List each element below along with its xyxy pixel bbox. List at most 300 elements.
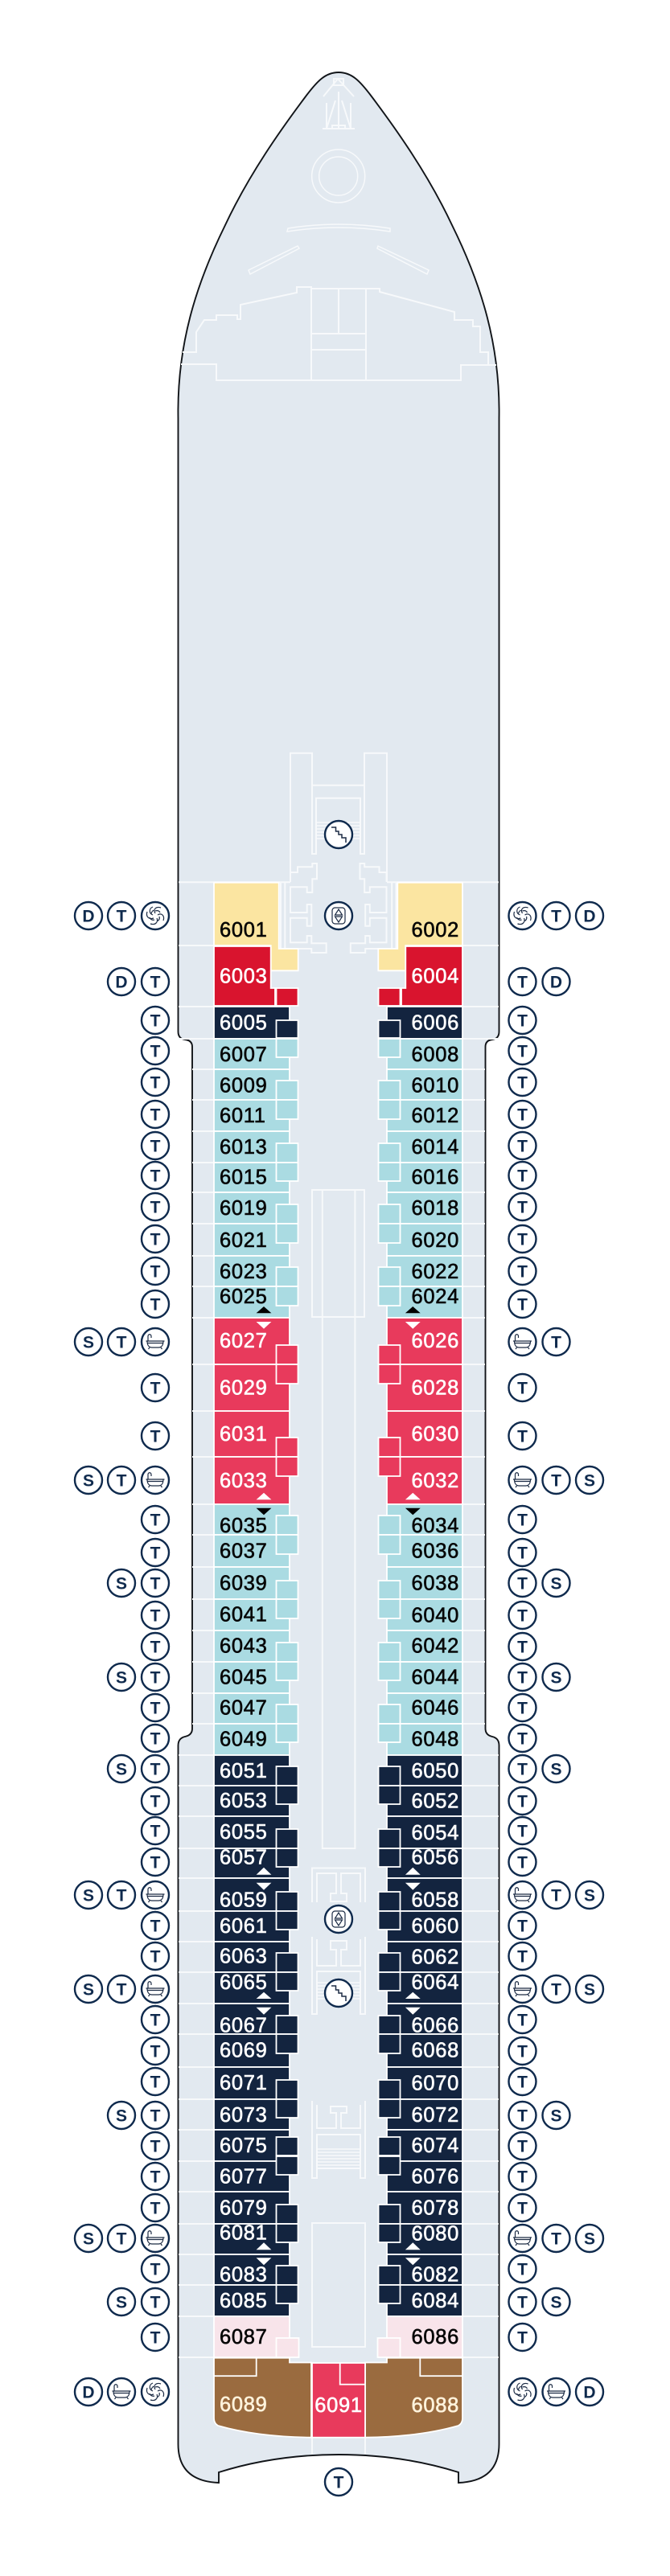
anchor winch [323,79,355,129]
cabin 6039: 6039 [220,1573,268,1595]
icons row 6065 [75,1975,169,2003]
icon 6031: T [150,1428,161,1446]
icon 6071: T [150,2073,161,2092]
icon 6011: T [150,1106,161,1124]
cabin 6074: 6074 [411,2135,459,2157]
cabin 6005 [214,1007,298,1039]
cabin 6040: 6040 [411,1605,459,1627]
cabin 6035 [214,1504,298,1537]
cabin 6011 [214,1100,298,1131]
cabin 6025: 6025 [220,1286,268,1308]
icon: aft twin bed: T [334,2473,344,2492]
cabin 6061 [214,1911,298,1942]
icons row 6080 [508,2225,603,2252]
icons row 6064: T [551,1981,561,1999]
icons row 6033 [75,1466,169,1494]
icon 6061 [142,1912,169,1939]
icon 6075: T [150,2137,161,2156]
cabin 6065: 6065 [220,1971,268,1994]
icon 6029 [142,1374,169,1401]
icon 6036: T [517,1544,528,1563]
icon 6061: T [150,1917,161,1936]
icons row 6038: S [550,1574,562,1594]
icon 6006: T [517,1011,528,1031]
cabin 6012: 6012 [411,1105,459,1127]
cabin 6021 [214,1224,298,1256]
icons row 6051 [108,1755,169,1782]
icon 6005: T [150,1011,161,1031]
icons row 6073 [108,2102,169,2129]
icon: aft twin bed [325,2468,352,2496]
cabin 6028 [378,1364,462,1411]
cabin 6089: 6089 [220,2393,268,2416]
icon 6067 [142,2006,169,2033]
icons row 6027 [75,1328,169,1356]
cabin 6069 [214,2034,298,2067]
cabin 6051 [214,1755,298,1786]
icon 6049 [142,1725,169,1752]
cabin 6018 [378,1192,462,1224]
aft stair lines [312,2101,365,2178]
icon 6049: T [150,1730,161,1748]
icons row 6026: T [551,1333,561,1352]
icon 6052: T [517,1793,528,1811]
icon 6015: T [150,1167,161,1185]
icon 6083 [142,2255,169,2283]
icons row 6026 [508,1328,569,1356]
icons row 6032 [508,1466,603,1494]
icon 6042 [508,1633,536,1660]
icon 6070: T [517,2073,528,2092]
cabin 6071 [214,2067,298,2099]
icon 6022: T [517,1262,528,1282]
cabin 6024 [378,1286,462,1318]
icon 6078 [508,2194,536,2221]
cabin 6045: 6045 [220,1666,268,1688]
icons row 6088: D [583,2383,596,2402]
icon 6014: T [517,1137,528,1156]
cabin 6073: 6073 [220,2104,268,2127]
cabin 6067 [214,2004,298,2037]
icon 6082 [508,2255,536,2283]
icons row 6084 [508,2288,569,2316]
icon 6048 [508,1725,536,1752]
icons row 6044: S [550,1669,562,1687]
cabin 6065 [214,1971,298,2004]
icon 6037: T [150,1544,161,1563]
cabin 6008 [378,1039,462,1069]
icon 6030: T [517,1428,528,1446]
icon 6012 [508,1101,536,1128]
icons row 6002 [508,902,603,929]
icons row 6064 [508,1975,603,2003]
icon 6077: T [150,2168,161,2187]
icon 6007: T [150,1042,161,1061]
cabin 6032 [378,1457,462,1504]
icon 6053: T [150,1793,161,1811]
icon 6037 [142,1539,169,1566]
cabin 6025 [214,1286,298,1318]
cabin 6057: 6057 [220,1847,268,1869]
icon 6057 [142,1848,169,1876]
cabin 6001 [214,883,298,970]
curved bench [287,224,390,232]
cabin 6010 [378,1069,462,1100]
icon 6063: T [150,1947,161,1967]
cabin 6042: 6042 [411,1635,459,1658]
icons row 6032: S [584,1471,595,1491]
icons row 6004: D [550,973,562,992]
cabin 6016 [378,1163,462,1192]
cabin 6078: 6078 [411,2197,459,2220]
icon 6035: T [150,1512,161,1529]
icon 6060: T [517,1917,528,1936]
cabin 6086: 6086 [411,2326,459,2348]
cabin 6014 [378,1131,462,1163]
icons row 6088 [508,2378,603,2406]
cabin 6080 [378,2223,462,2254]
cabin 6003: 6003 [220,966,268,988]
cabin 6002: 6002 [411,919,459,941]
cabin 6088: 6088 [411,2394,459,2417]
cabin 6059: 6059 [220,1889,268,1912]
icons row 6085: T [150,2293,161,2312]
icons row 6039 [108,1569,169,1597]
icon 6054: T [517,1822,528,1841]
icon 6014 [508,1132,536,1159]
cabin 6015 [214,1163,298,1192]
cabin 6056 [378,1847,462,1878]
cabin 6058: 6058 [411,1889,459,1912]
cabin 6078 [378,2192,462,2224]
icon 6012: T [517,1106,528,1124]
cabin 6069: 6069 [220,2039,268,2061]
cabin 6061: 6061 [220,1915,268,1938]
icons row 6089: D [82,2383,95,2402]
cabin 6048: 6048 [411,1729,459,1751]
icon: forward stairs [325,821,352,848]
cabin 6051: 6051 [220,1760,268,1782]
icons row 6001: D [82,907,95,926]
cabin 6026: 6026 [411,1330,459,1352]
cabin 6072: 6072 [411,2104,459,2127]
icon 6008: T [517,1042,528,1061]
icons row 6003: T [150,973,161,992]
cabin 6014: 6014 [411,1136,459,1159]
icons row 6085: S [116,2293,127,2312]
icons row 6045 [108,1663,169,1691]
cabin 6042 [378,1631,462,1662]
cabin 6033 [214,1457,298,1504]
cabin 6036 [378,1535,462,1567]
cabin 6076 [378,2156,462,2192]
icon: midship lift [325,1905,352,1933]
icons row 6050: T [517,1761,528,1778]
cabin 6086 [378,2316,462,2357]
icon 6035 [142,1506,169,1533]
icon 6076 [508,2163,536,2190]
icon 6009: T [150,1074,161,1092]
cabin 6002 [378,883,462,970]
cabin 6050 [378,1755,462,1786]
cabin 6039 [214,1567,298,1599]
icon 6060 [508,1912,536,1939]
cabin 6055: 6055 [220,1821,268,1844]
cabin 6081 [214,2222,298,2254]
cabin 6070: 6070 [411,2073,459,2095]
cabin 6006: 6006 [411,1012,459,1035]
icon 6067: T [150,2012,161,2029]
icon 6024 [508,1290,536,1318]
icon 6031 [142,1422,169,1450]
icon 6040 [508,1602,536,1629]
icons row 6027: S [83,1333,94,1352]
icons row 6080: T [551,2230,561,2248]
icons row 6065: S [83,1981,94,1999]
icon 6024: T [517,1296,528,1314]
cabin 6035: 6035 [220,1515,268,1537]
icons row 6038: T [517,1574,528,1594]
cabin 6082: 6082 [411,2264,459,2287]
cabin 6005: 6005 [220,1012,268,1035]
icon 6009 [142,1069,169,1096]
cabin 6034 [378,1504,462,1537]
icons row 6058: T [551,1886,561,1905]
cabin 6050: 6050 [411,1760,459,1782]
icon 6005 [142,1007,169,1034]
icons row 6058: S [584,1886,595,1905]
icon 6066 [508,2006,536,2033]
cabin 6038 [378,1567,462,1599]
cabin 6053: 6053 [220,1790,268,1812]
icon 6055 [142,1817,169,1844]
cabin 6007 [214,1039,298,1069]
icon 6006 [508,1007,536,1034]
icon 6076: T [517,2168,528,2187]
cabin 6018: 6018 [411,1197,459,1220]
cabin 6013: 6013 [220,1136,268,1159]
icon 6023 [142,1257,169,1285]
cabin 6041: 6041 [220,1604,268,1626]
cabin 6032: 6032 [411,1470,459,1492]
icon 6079 [142,2194,169,2221]
cabin 6068 [378,2034,462,2067]
icons row 6084: S [550,2293,562,2312]
cabin 6059 [214,1878,298,1912]
icon 6015 [142,1162,169,1189]
icons row 6072: S [550,2106,562,2126]
icon 6021: T [150,1230,161,1249]
cabin 6043: 6043 [220,1635,268,1658]
icons row 6001: T [117,907,127,926]
cabin 6088 [365,2358,462,2438]
icon 6086: T [517,2328,528,2348]
icons row 6032: T [551,1471,561,1491]
icon 6047 [142,1694,169,1721]
cabin 6009 [214,1069,298,1100]
icon 6086 [508,2324,536,2351]
icons row 6050: S [550,1761,562,1778]
icons row 6080: S [584,2230,595,2248]
ship hull outline [178,72,499,2483]
cabin 6066 [378,2004,462,2037]
cabin 6049 [214,1724,298,1755]
cabin 6008: 6008 [411,1044,459,1066]
forward lift lobby lines [279,863,398,953]
icon 6071 [142,2068,169,2095]
cabin 6019: 6019 [220,1197,268,1220]
midship lift lines [312,1868,365,1902]
cabin 6084: 6084 [411,2290,459,2312]
icons row 6039: S [116,1574,127,1594]
cabin 6041 [214,1599,298,1631]
cabin 6030 [378,1411,462,1457]
icon 6041: T [150,1606,161,1626]
icons row 6085 [108,2288,169,2316]
icon 6056 [508,1848,536,1876]
icons row 6051: T [150,1761,161,1778]
cabin 6023: 6023 [220,1261,268,1283]
cabin 6080: 6080 [411,2223,459,2246]
icon 6053 [142,1787,169,1815]
icons row 6027: T [117,1333,127,1352]
cabin 6070 [378,2067,462,2099]
forward stairwell lines [290,753,387,882]
cabin 6010: 6010 [411,1074,459,1097]
cabin 6072 [378,2099,462,2130]
cabin 6054: 6054 [411,1822,459,1844]
icon 6011 [142,1101,169,1128]
icons row 6089 [75,2378,169,2406]
icon 6020 [508,1225,536,1253]
icon 6010 [508,1069,536,1096]
icon 6078: T [517,2200,528,2217]
icon 6016 [508,1162,536,1189]
icon 6028 [508,1374,536,1401]
icons row 6059: S [83,1886,94,1905]
icons row 6072: T [517,2106,528,2126]
cabin 6045 [214,1662,298,1693]
cabin 6044 [378,1662,462,1693]
cabin 6015: 6015 [220,1167,268,1189]
cabin 6052 [378,1786,462,1816]
icon 6056: T [517,1854,528,1872]
icons row 6059 [75,1881,169,1909]
icon 6075 [142,2132,169,2160]
icon 6043: T [150,1639,161,1656]
cabin 6082 [378,2254,462,2287]
icons row 6033: T [117,1471,127,1491]
cabin 6016: 6016 [411,1167,459,1189]
cabin 6063: 6063 [220,1946,268,1968]
icon 6062: T [517,1947,528,1967]
cabin 6023 [214,1256,298,1286]
icon 6025: T [150,1296,161,1314]
icon 6034 [508,1506,536,1533]
cabin 6026 [378,1318,462,1364]
icon 6042: T [517,1639,528,1656]
icons row 6004: T [517,973,528,992]
icon 6028: T [517,1380,528,1397]
cabin 6085 [214,2285,298,2316]
cabin 6057 [214,1847,298,1878]
cabin 6022: 6022 [411,1261,459,1283]
icon 6074: T [517,2137,528,2156]
icon 6029: T [150,1380,161,1397]
icons row 6044 [508,1663,569,1691]
icons row 6065: T [117,1981,127,1999]
icon 6034: T [517,1512,528,1529]
icon 6066: T [517,2012,528,2029]
cabin 6077 [214,2156,298,2192]
cabin 6046 [378,1693,462,1724]
angled benches [249,246,429,274]
cabin 6083: 6083 [220,2264,268,2287]
cabin 6020: 6020 [411,1229,459,1252]
icons row 6073: T [150,2106,161,2126]
cabin 6062: 6062 [411,1946,459,1968]
cabin 6036: 6036 [411,1540,459,1563]
cabin 6027: 6027 [220,1330,268,1352]
icons row 6050 [508,1755,569,1782]
cabin 6020 [378,1224,462,1256]
icon 6052 [508,1787,536,1815]
cabin 6063 [214,1942,298,1972]
cabin 6019 [214,1192,298,1224]
icon 6036 [508,1539,536,1566]
cabin 6024: 6024 [411,1286,459,1308]
bow deck equipment [181,79,496,380]
cabin 6007: 6007 [220,1044,268,1066]
cabin 6044: 6044 [411,1666,459,1688]
icon 6046 [508,1694,536,1721]
cabin 6003 [214,946,298,1006]
cabin 6031: 6031 [220,1423,268,1446]
bow ring [312,150,365,203]
cabin 6056: 6056 [411,1847,459,1869]
icons row 6081: S [83,2230,94,2248]
cabin 6011: 6011 [220,1105,266,1127]
icon 6019 [142,1193,169,1220]
icon 6070 [508,2068,536,2095]
icons row 6081: T [117,2230,127,2248]
icons row 6002: D [583,907,596,926]
cabin 6046: 6046 [411,1696,459,1719]
cabin 6012 [378,1100,462,1131]
cabin 6028: 6028 [411,1377,459,1400]
icon: forward lift [325,902,352,929]
cabin 6091 [312,2363,365,2438]
icon 6082: T [517,2261,528,2279]
cabin 6049: 6049 [220,1729,268,1751]
cabin 6052: 6052 [411,1790,459,1813]
icons row 6038 [508,1569,569,1597]
cabin 6038: 6038 [411,1573,459,1595]
icons row 6051: S [116,1761,127,1778]
icon 6018 [508,1193,536,1220]
cabin 6047 [214,1693,298,1724]
icon 6041 [142,1602,169,1629]
icon 6019: T [150,1198,161,1217]
icons row 6059: T [117,1886,127,1905]
cabin 6013 [214,1131,298,1163]
cabin 6009: 6009 [220,1074,268,1097]
icons row 6003 [108,968,169,995]
cabin 6027 [214,1318,298,1364]
icon 6010: T [517,1074,528,1092]
icon 6047: T [150,1700,161,1717]
cabin 6058 [378,1878,462,1912]
